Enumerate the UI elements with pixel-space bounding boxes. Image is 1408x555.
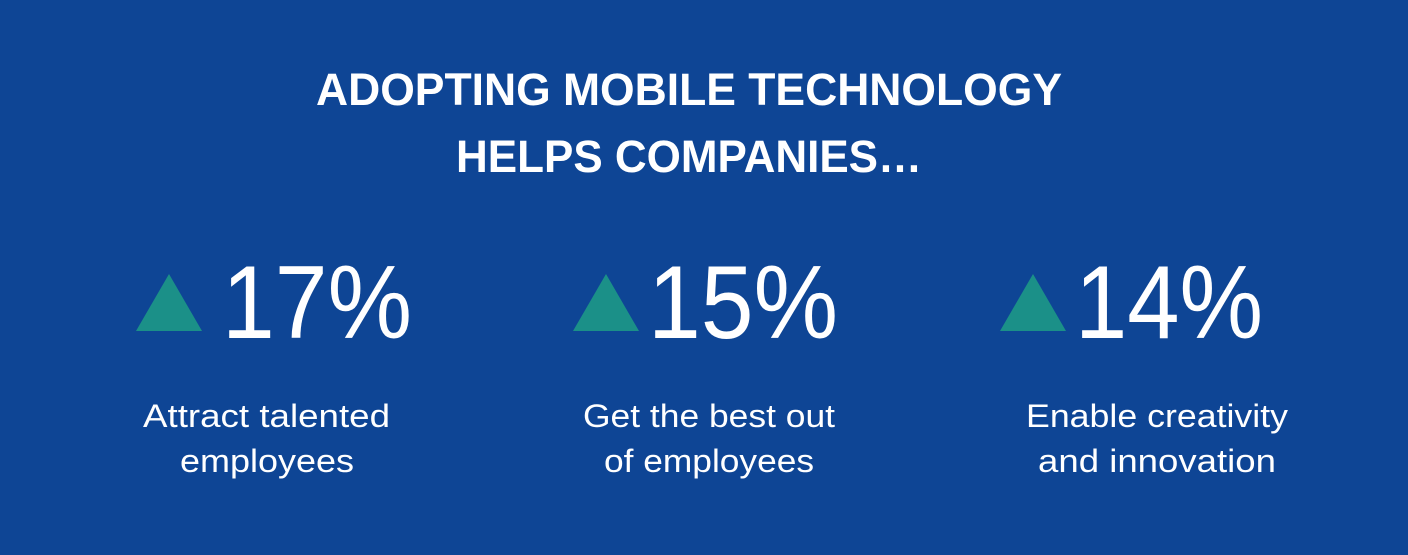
icon: up triangle 3 <box>1000 274 1066 331</box>
panel: best out of employees <box>573 245 838 479</box>
title <box>316 64 1062 182</box>
title: ADOPTING MOBILE TECHNOLOGY <box>316 64 1062 115</box>
label 1: Attract talented <box>143 398 390 434</box>
label 3: Enable creativity <box>1026 398 1288 434</box>
stat 14%: 14% <box>1075 245 1263 361</box>
panel: creativity <box>1000 245 1288 479</box>
label 2: of employees <box>604 443 814 479</box>
icon: up triangle 1 <box>136 274 202 331</box>
label 1: employees <box>180 443 354 479</box>
icon: up triangle 2 <box>573 274 639 331</box>
label 2 <box>583 398 835 479</box>
stat 15%: 15% <box>648 245 838 361</box>
label 3 <box>1026 398 1288 479</box>
label 2: Get the best out <box>583 398 835 434</box>
title: HELPS COMPANIES… <box>456 131 922 182</box>
stat 17%: 17% <box>222 245 412 361</box>
panel: attract talent <box>136 245 412 479</box>
label 3: and innovation <box>1038 443 1276 479</box>
label 1 <box>143 398 390 479</box>
